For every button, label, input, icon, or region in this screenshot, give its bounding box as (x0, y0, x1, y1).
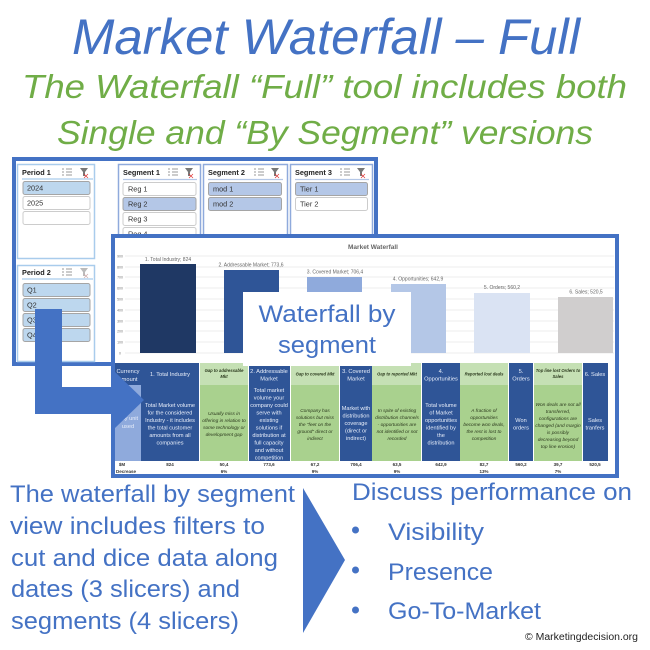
data table: volume your (254, 396, 284, 402)
data table: configurations are (539, 416, 577, 422)
data table: Won (515, 418, 527, 424)
title: Market Waterfall – Full (72, 9, 582, 65)
data table: existing (260, 418, 278, 424)
data table: for the considered (148, 410, 192, 416)
data table: Orders (512, 376, 530, 382)
data table: Company has (300, 408, 330, 414)
data table: amount (119, 377, 138, 383)
data table: In spite of existing (378, 408, 417, 414)
text block: discuss performance (352, 479, 632, 625)
text block: discuss performance: Go-To-Market (388, 598, 541, 625)
text block: filters description: The waterfall by segment (10, 481, 295, 508)
data table: recorded (388, 436, 407, 442)
data table: the total customer (148, 426, 192, 432)
data table: orders (513, 426, 529, 432)
data table: some technology or (203, 425, 245, 431)
data table: distribution (342, 414, 370, 420)
data table: 4. (439, 369, 444, 375)
bar chart: 100 (117, 340, 123, 344)
arrow: chevron triangle (303, 488, 345, 633)
subtitle: Single and “By Segment” versions (57, 115, 593, 152)
data table: Mkt (220, 374, 228, 379)
data table: opportunities (470, 415, 498, 421)
data table: 50,4 (220, 462, 229, 467)
bar chart: 1. Total Industry; 824 (145, 257, 191, 263)
data table: the "feet on the (299, 422, 332, 428)
data table: distribution channels (375, 415, 419, 421)
data table: coverage (344, 421, 368, 427)
data table: transferred, (546, 409, 570, 415)
slicer: Period 1: 2025 (27, 198, 43, 208)
data table: the (437, 433, 445, 439)
data table: company could (250, 403, 288, 409)
data table: indirect) (346, 436, 366, 442)
data table: of Market (429, 410, 453, 416)
data table: top line erosion) (541, 444, 575, 450)
data table: 13% (479, 469, 489, 474)
data table: 773,6 (263, 462, 275, 467)
data table: competition (472, 436, 497, 442)
data table: 67,2 (311, 462, 320, 467)
data table: 39,7 (554, 462, 563, 467)
bar chart: 3. Covered Market; 706,4 (307, 270, 363, 276)
text block: filters description: cut and dice data along (11, 545, 278, 572)
subtitle (22, 69, 627, 152)
data table: Currency (116, 369, 140, 375)
data table: 560,2 (515, 462, 527, 467)
data table: changed (and margin (535, 423, 581, 429)
bar chart: 6. Sales; 520,5 (569, 290, 603, 296)
data table: Market (347, 376, 365, 382)
slicer: Period 1: 2024 (27, 184, 43, 192)
data table: 642,9 (435, 462, 447, 467)
bar chart: 5. Orders; 560,2 (484, 285, 520, 291)
data table: Any unit (118, 416, 139, 422)
data table: 824 (166, 462, 174, 467)
data table: 6. Sales (585, 372, 605, 378)
data table: $M (119, 462, 125, 467)
data table: indirect (307, 436, 323, 442)
data table: is possibly (547, 430, 570, 436)
data table: Industry - it includes (145, 418, 195, 424)
data table: ground" direct or (297, 429, 333, 435)
bar chart: 300 (117, 320, 123, 324)
slicer: Segment 3: Tier 1 (300, 184, 318, 194)
data table: Market (260, 376, 278, 382)
slicer: Period 2: Period 2 (22, 268, 51, 277)
slicer: Segment 3: Segment 3 (295, 168, 332, 177)
slicer: Segment 1: Segment 1 (123, 168, 160, 177)
bar chart: 600 (117, 286, 123, 290)
arrow: from slicers to table (35, 309, 144, 428)
data table: full capacity (254, 440, 284, 446)
data table: used (122, 424, 134, 430)
slicer: Segment 3 (290, 164, 372, 254)
text block: filters description: dates (3 slicers) and (11, 576, 240, 603)
data table: amounts from all (149, 433, 191, 439)
data table: solutions but miss (296, 415, 335, 421)
data table: solutions if (256, 426, 283, 432)
text block: discuss performance: Discuss performance on (352, 479, 632, 506)
slicer: Segment 1: Reg 2 (128, 200, 147, 208)
data table: 3. Covered (342, 369, 370, 375)
slicer: Period 2: Q2 (27, 300, 37, 310)
slicer: Period 2 (18, 266, 94, 362)
data table: Decrease (116, 469, 136, 474)
data table: 2. Addressable (250, 369, 288, 375)
data table: Total Market volume (145, 403, 195, 409)
text block: discuss performance: Presence (388, 559, 493, 586)
data table: (direct or (345, 428, 367, 434)
data table: identified by (426, 426, 456, 432)
data table: Market with (342, 406, 370, 412)
data table: 520,5 (589, 462, 601, 467)
data table: 706,4 (350, 462, 362, 467)
bar chart: 400 (117, 308, 123, 312)
data table: development gap (206, 432, 243, 438)
panel: slicers (14, 159, 376, 364)
data table: companies (156, 440, 184, 446)
data table: Sales (553, 374, 564, 379)
data table: 82,7 (480, 462, 489, 467)
data table: distribution (427, 440, 455, 446)
data table: decreasing beyond (538, 437, 579, 443)
data table: Gap to covered Mkt (296, 372, 335, 376)
bar chart: 200 (117, 330, 123, 334)
panel: market waterfall chart and table (113, 236, 617, 476)
slicer: Period 2: Q3 (27, 316, 37, 324)
data table: offering in relation to (202, 418, 246, 424)
data table: Top line lost Orders to (536, 368, 581, 373)
data table: competition (255, 456, 283, 462)
slicer: Period 2: Q4 (27, 330, 37, 340)
callout: waterfall by segment (243, 292, 411, 366)
text block: discuss performance: Visibility (388, 519, 485, 546)
bar chart: 700 (117, 276, 123, 280)
slicer: Segment 3: Tier 2 (300, 200, 318, 208)
bar chart: 800 (117, 266, 123, 270)
slicer: Segment 2: Segment 2 (208, 168, 245, 177)
subtitle: The Waterfall “Full” tool includes both (22, 69, 627, 106)
data table: become won deals, (463, 422, 505, 428)
data table: Total volume (425, 403, 457, 409)
bar chart: 2. Addressable Market; 773,6 (218, 262, 284, 268)
bar chart: 900 (117, 254, 123, 258)
bar chart (117, 244, 614, 356)
data table: Total market (254, 388, 285, 394)
data table: Reported lost deals (465, 372, 504, 376)
data table: 5. (519, 369, 524, 375)
slicer: Segment 1: Reg 3 (128, 214, 147, 224)
slicer: Segment 1: Reg 1 (128, 184, 147, 194)
slicer: Segment 2: mod 1 (213, 184, 233, 194)
data table: tranfers (586, 426, 605, 432)
data table: 7% (555, 469, 561, 474)
slicer: Segment 1: Reg 4 (128, 230, 147, 238)
data table (115, 363, 608, 474)
slicer: Period 1 (18, 164, 94, 258)
slicer: Segment 2: mod 2 (213, 200, 233, 208)
data table: Gap to reported Mkt (377, 372, 417, 376)
data table: Opportunities (424, 376, 458, 382)
data table: serve with (256, 410, 282, 416)
data table: Sales (588, 418, 602, 424)
data table: 1. Total Industry (150, 372, 190, 378)
data table: Won deals are not all (535, 402, 581, 408)
text block: filters description (10, 481, 295, 635)
data table: distribution at (252, 433, 286, 439)
slicer: Segment 1 (118, 164, 200, 254)
data table: Usually miss in (208, 411, 240, 417)
data table: the rest is lost to (467, 429, 502, 435)
callout: waterfall by segment: segment (278, 332, 376, 359)
callout: waterfall by segment: Waterfall by (258, 301, 396, 328)
data table: 63,5 (393, 462, 402, 467)
bar chart: 0 (119, 352, 121, 356)
data table: 6% (221, 469, 227, 474)
footer credit: © Marketingdecision.org (525, 632, 638, 643)
data table: 9% (312, 469, 318, 474)
bar chart: Market Waterfall (348, 244, 398, 251)
text block: filters description: segments (4 slicers) (11, 608, 239, 635)
slicer: Segment 2 (204, 164, 288, 254)
data table: A fraction of (470, 408, 497, 414)
data table: - opportunities are (378, 422, 417, 428)
text block: filters description: view includes filters to (10, 513, 265, 540)
data table: and without (255, 448, 284, 454)
data table: opportunities (425, 418, 457, 424)
slicer: Period 2: Q1 (27, 286, 37, 294)
slicer: Period 1: Period 1 (22, 168, 51, 177)
data table: not identified or not (377, 429, 418, 435)
data table: Gap to addressable (205, 368, 244, 373)
data table: 9% (394, 469, 400, 474)
bar chart: 500 (117, 298, 123, 302)
bar chart: 4. Opportunities; 642,9 (393, 276, 444, 282)
